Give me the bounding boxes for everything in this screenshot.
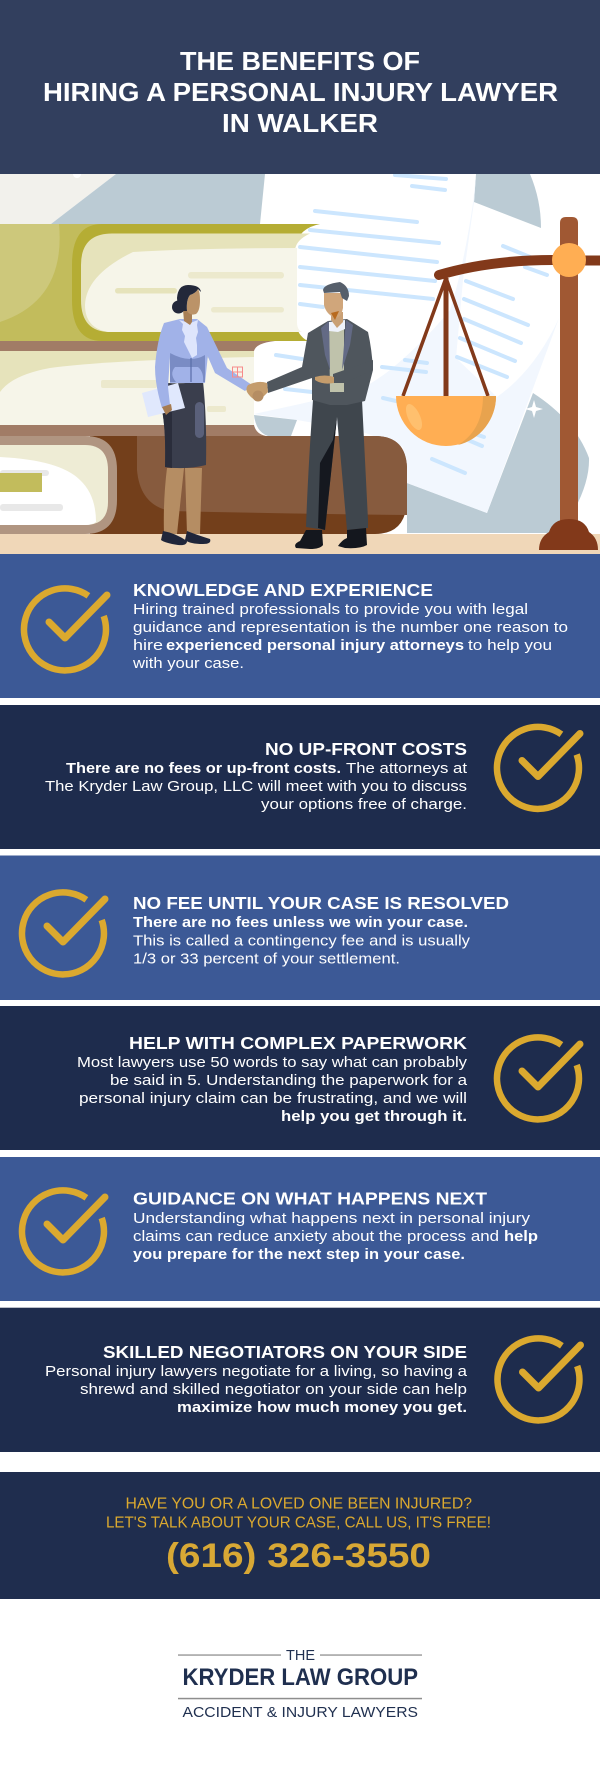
title: IN WALKER bbox=[222, 108, 378, 138]
panel: no up-front costs bbox=[0, 705, 600, 849]
text block: knowledge and experience: with your case. bbox=[132, 655, 244, 672]
heading: guidance on what happens next: GUIDANCE ON WHAT HAPPENS NEXT bbox=[133, 1189, 487, 1209]
heading: knowledge and experience: KNOWLEDGE AND EXPERIENCE bbox=[133, 580, 433, 600]
icon: check circle bbox=[497, 1338, 580, 1420]
text block: help with complex paperwork: help you get through it. bbox=[281, 1108, 467, 1125]
callout text: LET'S TALK ABOUT YOUR CASE, CALL US, IT'S FREE! bbox=[106, 1515, 491, 1532]
text block: guidance on what happens next bbox=[133, 1210, 538, 1263]
figure: woman in blue blouse bbox=[142, 285, 252, 545]
text block: no fee until resolved bbox=[133, 914, 471, 968]
icon: check circle bbox=[497, 1037, 580, 1119]
text block: guidance on what happens next: help bbox=[504, 1228, 538, 1245]
panel: skilled negotiators on your side bbox=[0, 1308, 600, 1452]
stacked books bbox=[0, 224, 407, 534]
logo: the kryder law group: KRYDER LAW GROUP bbox=[182, 1665, 418, 1691]
text block: skilled negotiators: Personal injury lawyers negotiate for a living, so having a bbox=[45, 1363, 468, 1380]
text block: help with complex paperwork: Most lawyers use 50 words to say what can probably bbox=[77, 1054, 468, 1071]
text block: no fee until resolved: This is called a contingency fee and is usually bbox=[133, 932, 471, 950]
icon: check circle bbox=[497, 727, 580, 809]
text block: help with complex paperwork: be said in 5. Understanding the paperwork for a bbox=[110, 1072, 468, 1089]
icon: check circle bbox=[24, 588, 107, 670]
panel: no fee until your case is resolved bbox=[0, 856, 600, 1000]
floor bbox=[0, 534, 600, 554]
text block: guidance on what happens next: you prepare for the next step in your case. bbox=[133, 1246, 465, 1263]
text block: no fee until resolved: There are no fees unless we win your case. bbox=[133, 914, 468, 931]
document text lines bbox=[276, 175, 547, 473]
text block: guidance on what happens next: claims can reduce anxiety about the process and bbox=[133, 1228, 499, 1245]
text block: no up-front costs: There are no fees or up-front costs. bbox=[66, 760, 341, 777]
phone number: (616) 326-3550 bbox=[166, 1537, 431, 1575]
panel: call to action bbox=[0, 1472, 600, 1599]
text block: skilled negotiators: maximize how much money you get. bbox=[177, 1399, 467, 1416]
text block: knowledge and experience: to help you bbox=[468, 637, 552, 654]
text block: knowledge and experience: guidance and representation is the number one reason to bbox=[133, 619, 568, 636]
scales of justice bbox=[396, 217, 600, 550]
logo: the kryder law group: THE bbox=[286, 1648, 315, 1664]
callout text: HAVE YOU OR A LOVED ONE BEEN INJURED? bbox=[126, 1496, 472, 1513]
text block: knowledge and experience: hire bbox=[133, 637, 163, 654]
panel: knowledge and experience bbox=[0, 554, 600, 698]
text block: guidance on what happens next: Understanding what happens next in personal injury bbox=[133, 1210, 531, 1227]
panel: help with complex paperwork bbox=[0, 1006, 600, 1150]
small red marker bbox=[232, 367, 242, 377]
icon: check circle bbox=[22, 1190, 105, 1272]
text block: knowledge and experience bbox=[132, 601, 568, 672]
title: THE BENEFITS OF bbox=[180, 46, 420, 76]
text block: help with complex paperwork bbox=[77, 1054, 468, 1125]
text block: no fee until resolved: 1/3 or 33 percent of your settlement. bbox=[133, 950, 400, 968]
header banner bbox=[0, 0, 600, 174]
heading: help with complex paperwork: HELP WITH COMPLEX PAPERWORK bbox=[129, 1033, 467, 1053]
text block: help with complex paperwork: personal injury claim can be frustrating, and we will bbox=[79, 1090, 467, 1107]
heading: skilled negotiators: SKILLED NEGOTIATORS ON YOUR SIDE bbox=[103, 1342, 467, 1362]
callout text bbox=[106, 1496, 491, 1532]
text block: no up-front costs bbox=[45, 760, 468, 813]
text block: knowledge and experience: Hiring trained professionals to provide you with legal bbox=[133, 601, 528, 618]
text block: no up-front costs: your options free of charge. bbox=[261, 796, 467, 813]
icon: check circle bbox=[22, 892, 105, 974]
title: HIRING A PERSONAL INJURY LAWYER bbox=[43, 77, 558, 107]
heading: no fee until resolved: NO FEE UNTIL YOUR CASE IS RESOLVED bbox=[133, 893, 509, 913]
logo: the kryder law group bbox=[178, 1648, 422, 1721]
title bbox=[43, 46, 558, 138]
illustration: lawyers shaking hands with books and scales bbox=[0, 174, 600, 554]
figure: man in grey suit bbox=[246, 282, 373, 549]
text block: no up-front costs: The attorneys at bbox=[346, 760, 468, 777]
text block: skilled negotiators: shrewd and skilled negotiator on your side can help bbox=[80, 1381, 467, 1398]
text block: no up-front costs: The Kryder Law Group, LLC will meet with you to discuss bbox=[45, 778, 467, 795]
panel: guidance on what happens next bbox=[0, 1157, 600, 1301]
text block: skilled negotiators bbox=[45, 1363, 468, 1416]
logo: the kryder law group: ACCIDENT & INJURY LAWYERS bbox=[182, 1705, 418, 1721]
heading: no up-front costs: NO UP-FRONT COSTS bbox=[265, 739, 467, 759]
text block: knowledge and experience: experienced personal injury attorneys bbox=[166, 637, 464, 654]
